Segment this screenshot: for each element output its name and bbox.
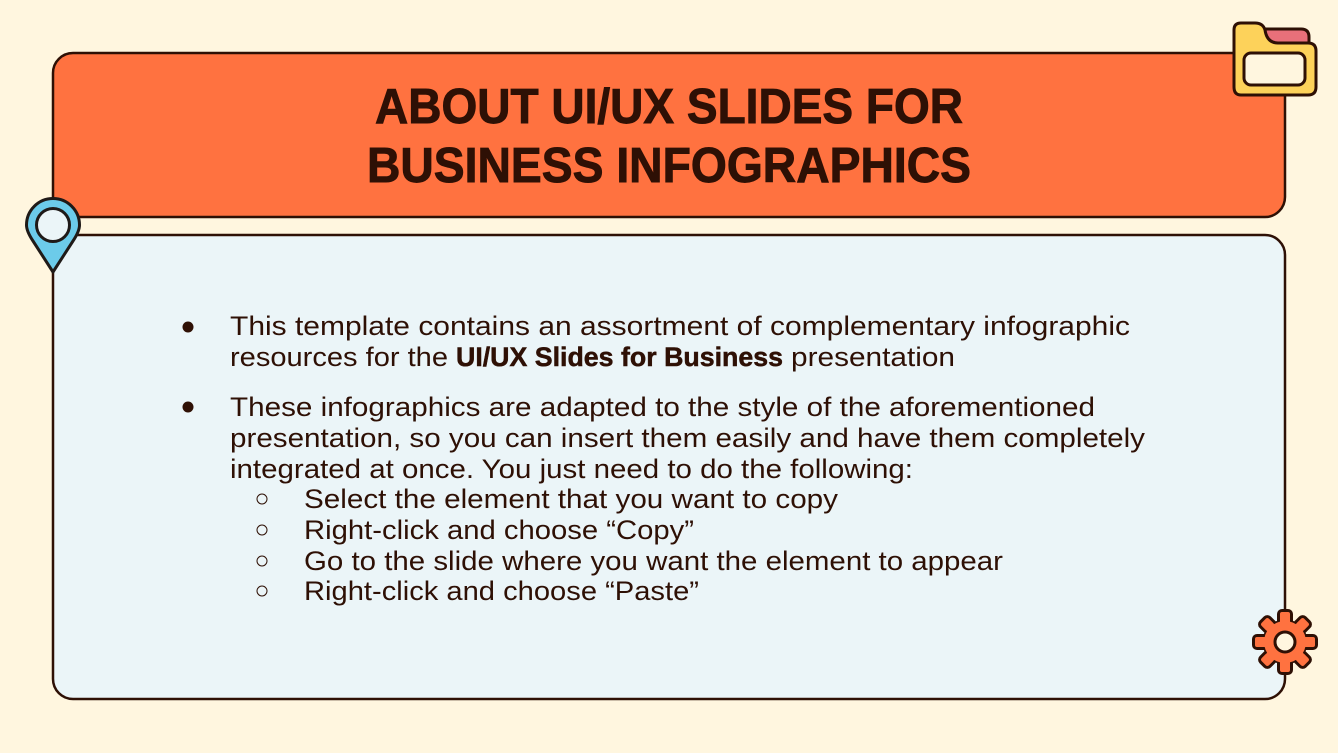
bullet item 2: integrated at once. You just need to do the following: (230, 454, 913, 484)
icon: map pin (26, 198, 80, 272)
title: BUSINESS INFOGRAPHICS (367, 139, 971, 193)
panel: title header (53, 53, 1285, 217)
panel: content body (53, 235, 1285, 699)
title (367, 80, 971, 193)
icon: folder (1234, 23, 1316, 95)
bullet item 1: resources for the (230, 342, 448, 372)
bullet item 1: This template contains an assortment of complementary infographic (230, 311, 1130, 341)
title: ABOUT UI/UX SLIDES FOR (375, 80, 963, 134)
sub-bullet 1: Select the element that you want to copy (304, 484, 839, 514)
sub-bullet 4: Right-click and choose “Paste” (304, 576, 699, 606)
bullet item 1 (182, 311, 1130, 372)
sub-bullet 2: Right-click and choose “Copy” (304, 515, 694, 545)
bullet item 1: presentation (791, 342, 955, 372)
bullet item 2: These infographics are adapted to the style of the aforementioned (230, 392, 1095, 422)
bullet item 2: presentation, so you can insert them easily and have them completely (230, 423, 1146, 453)
bullet item 2 (182, 392, 1146, 484)
icon: gear (1254, 610, 1316, 674)
bullet list (182, 311, 1146, 606)
bullet item 1: UI/UX Slides for Business (456, 342, 783, 372)
sub-bullet 3: Go to the slide where you want the element to appear (304, 546, 1003, 576)
